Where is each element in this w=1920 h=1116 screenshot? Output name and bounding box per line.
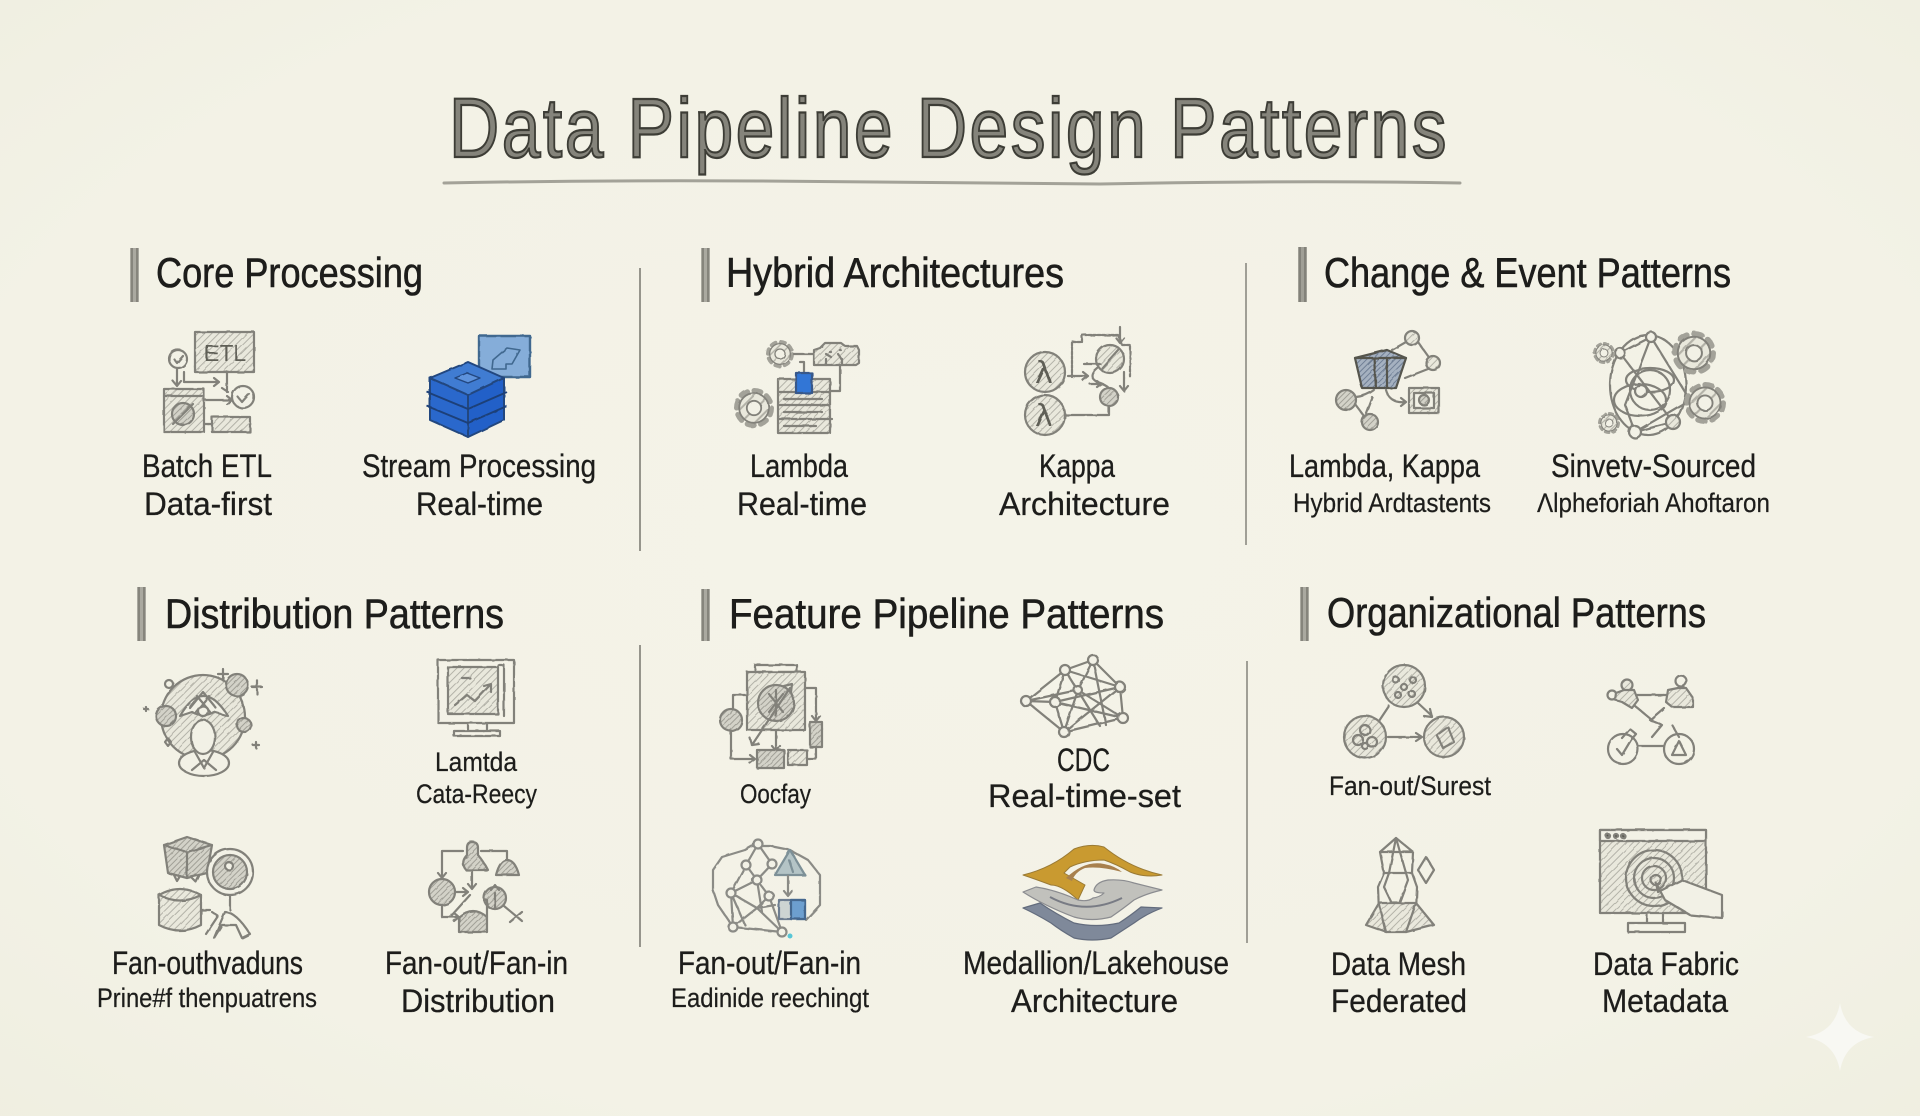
item: Fan-out/Surest — [1329, 665, 1491, 801]
icon: gears and document — [737, 342, 859, 433]
label: Oocfay — [740, 779, 811, 809]
label: CDC — [1057, 742, 1110, 778]
label: Distribution — [401, 983, 555, 1019]
heading: Change & Event Patterns: Change & Event Patterns — [1324, 249, 1731, 296]
label: Architecture — [999, 486, 1170, 522]
item: Lambda, Kappa — [1289, 331, 1491, 518]
icon: network mesh — [1021, 655, 1128, 737]
label: Medallion/Lakehouse — [963, 945, 1229, 981]
icon: monitor with chart — [438, 660, 514, 736]
item: Fan-outhvaduns — [97, 837, 317, 1013]
label: Lamtda — [435, 747, 518, 777]
label — [1537, 448, 1770, 518]
icon: graph with blue square — [713, 840, 820, 938]
heading: Core Processing: Core Processing — [156, 249, 423, 296]
label — [362, 448, 596, 522]
item: Medallion/Lakehouse — [963, 845, 1229, 1019]
label — [416, 747, 537, 809]
item: Batch ETL — [142, 332, 272, 522]
label — [963, 945, 1229, 1019]
label — [1331, 946, 1467, 1019]
label: Real-time — [416, 486, 543, 522]
item: Fan-out/Fan-in feature — [671, 840, 869, 1013]
item: Kappa — [999, 327, 1170, 522]
label: Metadata — [1602, 983, 1728, 1019]
label: Lambda, Kappa — [1289, 448, 1480, 484]
label: Prine#f thenpuatrens — [97, 983, 317, 1013]
label: Data Mesh — [1331, 946, 1466, 982]
label: Federated — [1331, 983, 1467, 1019]
label: Data-first — [144, 486, 272, 522]
heading: Distribution Patterns: Distribution Patterns — [165, 590, 504, 637]
label — [142, 448, 272, 522]
heading: Hybrid Architectures: Hybrid Architectures — [726, 249, 1064, 296]
item: Data Mesh — [1331, 838, 1467, 1019]
label: Real-time — [737, 486, 867, 522]
item: CDC — [988, 655, 1181, 814]
icon: fan-out hierarchy — [429, 842, 522, 932]
panel: Core Processing — [130, 248, 596, 522]
item: Lamtda — [416, 660, 537, 809]
icon: browser fingerprint — [1600, 830, 1722, 932]
icon: medallion layers — [1023, 845, 1162, 940]
label: Data Fabric — [1593, 946, 1739, 982]
icon: lambda circles: λ — [1035, 356, 1053, 391]
heading: Organizational Patterns: Organizational Patterns — [1327, 589, 1706, 636]
item: Sinvetv-Sourced — [1537, 332, 1770, 518]
panel: Organizational Patterns — [1300, 587, 1739, 1019]
watermark sparkle — [1806, 1003, 1874, 1071]
icon: cube, cylinder, magnifier — [159, 837, 253, 938]
item: Fan-out/Fan-in — [385, 842, 568, 1019]
panel: Hybrid Architectures — [701, 248, 1170, 522]
label — [1289, 448, 1491, 518]
label — [737, 448, 867, 522]
label — [999, 448, 1170, 522]
icon: blue layered cube — [427, 336, 530, 437]
label: Hybrid Ardtastents — [1293, 488, 1491, 518]
label — [988, 742, 1181, 814]
icon: orbit figure — [144, 669, 262, 776]
item: Data Fabric — [1593, 830, 1739, 1019]
label: Fan-outhvaduns — [112, 945, 303, 981]
label: Kappa — [1039, 448, 1115, 484]
icon: globe and gears — [1594, 332, 1723, 438]
item: orbit figure — [144, 669, 262, 776]
label: Stream Processing — [362, 448, 596, 484]
icon: feature processor — [720, 665, 822, 768]
icon: ETL flow — [164, 332, 254, 432]
column divider left, bottom row — [639, 645, 641, 947]
item: Lambda — [737, 342, 867, 522]
item: Oocfay — [720, 665, 822, 809]
column divider right, bottom row — [1246, 661, 1248, 943]
icon: three linked circles — [1344, 665, 1464, 758]
title: Data Pipeline Design Patterns — [449, 81, 1449, 175]
panel: Feature Pipeline Patterns — [671, 589, 1229, 1019]
icon: crystal — [1366, 838, 1434, 932]
label — [97, 945, 317, 1013]
label: Fan-out/Fan-in — [678, 945, 861, 981]
label — [671, 945, 869, 1013]
panel: Change & Event Patterns — [1289, 247, 1770, 518]
icon: lambda circles: λ — [1035, 399, 1053, 434]
label: Cata-Reecy — [416, 779, 537, 809]
column divider right, top row — [1245, 263, 1247, 545]
heading: Feature Pipeline Patterns: Feature Pipeline Patterns — [729, 590, 1164, 637]
icon: people and wheels — [1608, 676, 1694, 764]
label: Sinvetv-Sourced — [1551, 448, 1756, 484]
label — [1593, 946, 1739, 1019]
label: Fan-out/Fan-in — [385, 945, 568, 981]
label: Real-time-set — [988, 778, 1181, 814]
label: Batch ETL — [142, 448, 272, 484]
icon: lambda circles — [1025, 327, 1130, 435]
item: Stream Processing — [362, 336, 596, 522]
item: people and wheels — [1608, 676, 1694, 764]
label: Λlpheforiah Ahoftaron — [1537, 488, 1770, 518]
label: Lambda — [750, 448, 848, 484]
label: Fan-out/Surest — [1329, 771, 1491, 801]
label: Eadinide reechingt — [671, 983, 869, 1013]
panel: Distribution Patterns — [97, 587, 568, 1019]
label — [385, 945, 568, 1019]
icon: box with nodes — [1336, 331, 1440, 430]
label: Architecture — [1011, 983, 1178, 1019]
column divider left, top row — [639, 268, 641, 551]
icon: ETL flow: ETL — [204, 340, 246, 366]
